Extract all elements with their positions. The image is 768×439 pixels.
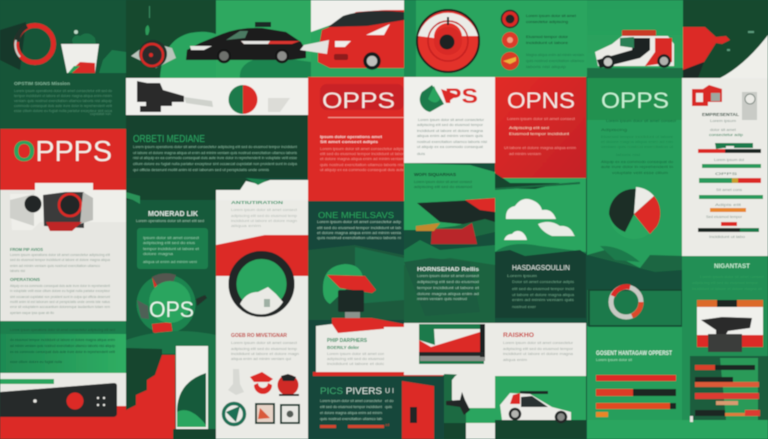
- text block: green band: [10, 328, 116, 364]
- list item one: consectetur adipiscing: [526, 20, 568, 24]
- icon row: small icons: [224, 369, 299, 424]
- body text: [133, 145, 298, 172]
- text block: white column bottom: GOEB RO MIVETIGNAR: [231, 333, 287, 339]
- body text: incididunt ut labore et dolore magna ali: [692, 287, 762, 291]
- list item three: laboris nisi aliquip: [526, 65, 566, 69]
- body text: incididunt ut labore et dolore magna: [503, 352, 574, 356]
- list item three: quis nostrud exercitation ullamco: [526, 59, 584, 63]
- label: heading tail: U I: [385, 388, 394, 395]
- heading: HASDAGSOULLIN: [512, 265, 570, 272]
- body text: et dolore magna aliqua enim ad minim venia: [317, 231, 402, 235]
- panel: car on green gradient: [587, 0, 683, 78]
- text block: laboris nisi: [616, 153, 640, 157]
- heading: MONERAD LIK: [148, 209, 199, 218]
- text block: ut aliquip ex ea commodo consequat duis aute: [320, 168, 404, 172]
- chart: horizontal bars: Sit amet cons: [716, 188, 742, 192]
- panel: target on green: [404, 0, 495, 77]
- body text: nisi ut aliquip ex ea commodo consequat duis aute irure dolor in reprehenderit in voluptate velit esse: [133, 156, 297, 160]
- chart: half pie: [228, 85, 258, 114]
- heading: ONE MHEILSAVS: [318, 210, 394, 220]
- text block: et dolore magna aliqua enim ad minim veniam: [320, 157, 404, 161]
- text block: Adipiscing elit sed: [509, 126, 549, 130]
- chart: horizontal bars: Incididunt ut labo: [709, 235, 745, 239]
- text block: white left: OPERATIONS: [10, 277, 40, 282]
- text block: white left: mollit anim id est laborum sed ut perspiciatis unde omnis iste natus: [10, 300, 110, 304]
- text block: Lorem ipsum dolor sit amet consectetur: [418, 118, 485, 122]
- text block: Eiusmod tempor incididunt: [509, 132, 570, 136]
- text block: elit sed do eiusmod tempor incididunt ut labor: [320, 152, 405, 156]
- text block: white left: Lorem ipsum operations dolor sit amet consectetur adipiscing elit: [10, 253, 111, 257]
- text block: top left: cupidatat non: [90, 112, 111, 116]
- panel: white strip with machine and pie: [126, 78, 308, 115]
- body text: tempor incididunt ut labore et: [417, 286, 480, 290]
- panel: top left dark green with ring and cup: [0, 0, 126, 129]
- icon: target: [417, 10, 479, 72]
- heading: RAISKHO: [503, 332, 534, 339]
- heading: PICS PIVERS: PICS PIVERS: [320, 386, 382, 397]
- heading: EMPRESENTAL: [702, 112, 739, 117]
- chart: pie: [609, 187, 660, 239]
- panel: red OPNS: [495, 77, 586, 178]
- text block: ut aliquip ex ea commodo consequat: [417, 145, 484, 149]
- panel: red OPPS centre left: [308, 77, 405, 201]
- title: OPPS: [322, 88, 395, 113]
- callout: green text box: aliqua ut enim ad minim veni: [143, 260, 197, 264]
- text block: white left: aperiam eaque ipsa quae ab illo: [10, 311, 54, 315]
- panel: green with clouds: [495, 173, 586, 260]
- text block: green band: ex ea commodo consequat duis aute irure dolor in reprehenderit velit: [10, 350, 116, 354]
- list item three: [501, 52, 584, 70]
- icon: red hat on green dome: [323, 264, 404, 336]
- text block: white column top: ANTIUTIRATION: [231, 200, 284, 206]
- chart: horizontal bars: Lorem ipsum dol: [714, 158, 744, 162]
- list item two: Eiusmod tempor dolor: [526, 35, 569, 39]
- text block: green lower: adipiscing elit sed do eiusmod: [414, 185, 472, 189]
- heading: NIGANTAST: [714, 263, 750, 270]
- title: OPNS: [507, 88, 575, 113]
- list item one: [502, 10, 577, 28]
- icon: document: [742, 92, 757, 120]
- icon: cup with plant: [61, 30, 126, 73]
- body text: elit sed do eiusmod tempor incid: [512, 287, 574, 291]
- text block: white column top: incididunt ut labore et dolore magn: [231, 219, 297, 223]
- icon: white car: [500, 391, 571, 422]
- body text: quis nostrud exercitation ullamco laboris ni: [317, 236, 401, 240]
- text block: top left: [14, 81, 113, 116]
- body text: [317, 220, 402, 240]
- text block: Aliquip ex ea commodo consequat du: [601, 160, 673, 164]
- panel: column two dark green with OPS dial: [126, 178, 255, 439]
- text block: [320, 134, 405, 172]
- panel: column two dark green with OPS dial: Lorem operations dolor sit amet elit sed: [136, 219, 204, 223]
- text fragments beside door: [385, 399, 393, 427]
- text block: green band: Lorem ipsum operations dolor sit amet consectetur adipiscing elit sed: [10, 328, 115, 332]
- body text: minim veniam quis nostrud: [417, 297, 467, 301]
- text block: adipiscing elit sed do eiusmod tempor: [417, 123, 484, 127]
- text block: top left: OPSTIM SIGNS Mission: [14, 81, 70, 86]
- body text: Lorem ipsum dolor sit amet consectetur: [503, 341, 574, 345]
- body text: ut labore et dolore magna aliqua: [512, 293, 575, 297]
- body text: [503, 341, 574, 362]
- text block: white left: in voluptate velit esse cillum dolore eu fugiat nulla pariatur excepteur: [10, 289, 111, 293]
- logo: OPS: PS: [445, 85, 478, 108]
- text block: white left: error sit voluptatem accusantium doloremque laudantium totam rem: [10, 305, 110, 309]
- card: white text card: BOERILY dolor: [327, 345, 359, 350]
- text block: top left: commodo consequat duis aute irure dolor in reprehenderit velit: [14, 104, 113, 108]
- panel: white card with bars: [682, 78, 768, 256]
- title: OPPS: OPPPS: [13, 136, 112, 168]
- icon: cloud right: [538, 222, 575, 236]
- body text: ut labore et dolore magna aliqua ut enim ad minim veniam quis nostrud exercitation ullamco laboris: [133, 151, 297, 155]
- body text: Lorem ipsum dolor sit amet consect: [417, 274, 480, 278]
- panel: icon list on green: [495, 0, 587, 77]
- text block: veniam quis nostrud exercitation ul: [601, 145, 673, 149]
- body text: Lorem ipsum: [507, 274, 537, 278]
- panel: lens and black car on green: [126, 0, 311, 78]
- text block: white left: laboris nisi: [10, 269, 25, 273]
- icon: red car: [300, 10, 404, 68]
- callout: green text box: tempor incididunt ut labore et: [143, 247, 200, 251]
- text block: white column bottom: [231, 333, 299, 361]
- icon: red staircase: [126, 348, 178, 439]
- text fragments beside door: ad: [385, 423, 389, 427]
- panel: device on white and red base: [0, 373, 126, 439]
- icon: red door: [402, 381, 434, 439]
- chart: horizontal bars: [698, 143, 763, 239]
- icon: cloud small: [504, 231, 527, 240]
- body text: dolore magna aliqua enim ad: [417, 292, 479, 296]
- body text: aliqua enim: [503, 358, 527, 362]
- text block: green band: ad minim veniam quis nostrud exercitation ullamco laboris nisi aliquip: [10, 344, 115, 348]
- chart: horizontal bars: Adipis elit: [715, 203, 743, 207]
- icon: small truck: [595, 30, 674, 68]
- list item two: incididunt ut labore: [526, 41, 568, 45]
- panel: white card with bars: consectetur adip: [709, 133, 743, 137]
- panel: green band with text: [0, 321, 126, 373]
- panel: white column with text and circle: [216, 178, 308, 439]
- panel: white card with bars: dolor sit amet: [710, 128, 737, 132]
- text block: [417, 118, 487, 156]
- icon: red ring: [0, 22, 54, 70]
- panel: white OPS logo: [404, 77, 495, 244]
- callout: green text box: dolore magna: [143, 252, 174, 256]
- text block: white left: sed do eiusmod tempor incididunt ut labore et dolore magna aliqua: [10, 258, 111, 262]
- text block: Ipsum dolor operations amet: [320, 134, 383, 139]
- text block: Ut labore et dolore magna aliqua enim: [504, 146, 576, 150]
- text block: ad minim veniam: [509, 152, 541, 156]
- list item three: Magna aliqua enim ad minim veniam: [526, 53, 584, 57]
- label: OPS: OPS: [149, 297, 194, 322]
- panel: red car on white: [300, 0, 404, 78]
- text block: white left: [10, 247, 111, 315]
- text block: white column bottom: Lorem ipsum dolor sit amet consect: [231, 341, 298, 345]
- text block: aliqua enim ad minim veniam quis: [417, 134, 483, 138]
- band: red wave: [216, 235, 308, 276]
- body text: adipiscing elit sed do eiusmod tempor: [503, 347, 574, 351]
- text block: green lower: Lorem ipsum dolor sit amet consect: [414, 180, 473, 184]
- icon: machine: [137, 81, 213, 112]
- list item two: [502, 32, 569, 48]
- chart: progress bars: [596, 375, 676, 417]
- panel: dark text block OBJECT MEDIANE: [126, 115, 308, 178]
- icon: camera: [10, 183, 126, 231]
- text block: white left: FROM PIP AVIOS: [10, 247, 43, 252]
- text fragments beside door: quis: [385, 405, 392, 409]
- text block: white left: sint occaecat cupidatat non proident sunt in culpa qui officia deserunt: [10, 295, 111, 299]
- text block: Sit amet consect adipis: [320, 139, 379, 144]
- text block: white column top: adipiscing elit sed do eiusmod temp: [231, 214, 297, 218]
- panel: dark green mid column with text: [404, 240, 495, 325]
- body text: nostrud exer: [512, 305, 537, 309]
- panel: bottom right green: [587, 256, 768, 439]
- icon: cloud large: [506, 199, 556, 219]
- text block: white left: Aliquip ex ea commodo consequat duis aute irure dolor in reprehenderit: [10, 284, 111, 288]
- icon: white card: [176, 346, 208, 429]
- text fragments beside door: et do: [385, 399, 393, 403]
- callout: green text box: Ipsum dolor sit amet consect: [143, 236, 200, 240]
- icon: red tag: [692, 85, 722, 106]
- card: white text card: PHIP DARPHERS: [327, 338, 368, 344]
- text block: white column bottom: incididunt ut labore et dolore magn: [231, 352, 299, 356]
- body text: Lorem ipsum dolor sit amet consectetur: [320, 399, 383, 403]
- chart: donut: [611, 287, 641, 317]
- panel: red OPPS left: [0, 129, 126, 190]
- body text: quis nostrud exercitation ullamco lab: [320, 417, 382, 421]
- text block: [601, 119, 677, 175]
- text block: white left: enim ad minim veniam quis nostrud exercitation ullamco: [10, 264, 100, 268]
- text block: green band: esse cillum dolore eu fugiat nulla: [10, 360, 63, 364]
- text block: nostrud exercitation ullamco laboris nisi: [417, 140, 487, 144]
- card: white text card: incididunt ut labore et dolore: [327, 362, 389, 366]
- text block: green band: do eiusmod tempor incididunt ut labore et dolore magna aliqua enim: [10, 338, 115, 342]
- body text: adipiscing elit sed do eiusmod: [417, 280, 479, 284]
- text block: top left: esse cillum dolore eu fugiat nulla pariatur excepteur sint occa: [14, 109, 113, 113]
- card: white text card: Lorem ipsum dolor sit amet consectetur: [327, 352, 400, 356]
- body text: [320, 399, 383, 421]
- chart: horizontal bars: Sed eiusmod tempor: [706, 215, 743, 219]
- body text: elit sed do eiusmod tempor incididunt: [320, 405, 383, 409]
- callout: green text box: adipiscing elit sed do eius: [143, 241, 195, 245]
- body text: et dolore magna aliqua enim ad minim: [320, 411, 382, 415]
- text block: top left: Lorem ipsum operations dolor sit amet consectetur elit sed do: [14, 89, 112, 93]
- body text: Dolor sit amet consectetur adipis: [512, 280, 574, 284]
- chart: stacked bars: [690, 356, 768, 422]
- panel: white left with text: [0, 183, 126, 321]
- icon: black device: [0, 383, 117, 417]
- text block: white column top: Lorem ipsum dolor sit amet consect: [231, 208, 298, 212]
- card: machine photo: [697, 300, 763, 352]
- text block: white column bottom: adipiscing elit sed do eiusmod temp: [231, 347, 297, 351]
- panel: white text and red door bottom: [320, 325, 495, 439]
- text block: [504, 117, 576, 156]
- panel: dark HASDAGSOULLIN text: [495, 250, 586, 318]
- body text: Lorem ipsum dolor sit amet consectetur adip: [317, 220, 401, 224]
- heading: ORBETI MEDIANE: [133, 133, 205, 145]
- body text: [507, 274, 575, 309]
- panel: bottom white blob and car: [444, 364, 586, 439]
- callout: green text box: [137, 228, 208, 269]
- text block: white column top: [231, 200, 298, 228]
- panel: white card with bars: Lorem ipsum: [710, 119, 736, 123]
- panel: white card with red scene and text: [404, 323, 586, 376]
- text block: green lower: [414, 172, 473, 189]
- chart: horizontal bars: OPPS: [715, 172, 738, 176]
- text block: quis nostrud exercitation ullamco laboris nisi: [320, 163, 404, 167]
- panel: dark band with ring: [587, 246, 683, 326]
- text block: aute irure dolor in reprehenderit in: [601, 165, 673, 169]
- text block: white column top: aliqua enim: [231, 224, 261, 228]
- card: white text card: [316, 324, 404, 372]
- text block: Lorem ipsum dolor sit amet consect: [507, 117, 576, 121]
- icon: camera lens: [131, 6, 176, 68]
- text block: Eiusmod tempor incididunt ut labore: [601, 135, 673, 139]
- text block: duis: [417, 152, 425, 156]
- icon: black ring with green circle: [232, 255, 290, 314]
- text block: top left: veniam quis nostrud exercitation ullamco laboris nisi aliquip: [14, 99, 112, 103]
- text block: Lorem ipsum dolor sit amet consectetur adipis: [320, 147, 404, 151]
- text block: green lower: WOPI SIQUARHAS: [414, 172, 456, 177]
- icon: silhouette: [446, 392, 470, 415]
- card: white text card: adipiscing elit sed do eiusmod tempor: [327, 357, 400, 361]
- body text: enim ad minim veniam quis: [512, 298, 574, 302]
- heading: HORNSEHAD Rellis: [417, 267, 479, 273]
- body text: adipiscing elit sed do eiusmod tempor: [692, 281, 759, 285]
- list item one: Lorem ipsum dolor sit amet: [526, 14, 577, 18]
- panel: top right dark with red shape: [683, 0, 768, 78]
- icon: plane wedge: [416, 198, 495, 244]
- icon: black car: [186, 22, 306, 62]
- body text: qui officia deserunt mollit anim id est laborum sed ut perspiciatis unde omnis: [133, 168, 269, 172]
- text block: voluptate velit esse cillum: [612, 171, 668, 175]
- text block: top left: tempor incididunt ut labore et dolore magna aliqua enim minim: [14, 94, 112, 98]
- text block: white column bottom: aliqua enim ad minim veniam qui: [231, 357, 291, 361]
- body text: elit sed do eiusmod tempor incididunt ut lab: [317, 226, 401, 230]
- icon: red scene: [419, 324, 485, 364]
- panel: dark column with heading, hat and card: [308, 201, 404, 439]
- title: OPPS: [601, 88, 669, 113]
- body text: Lorem ipsum operations dolor sit amet consectetur adipiscing elit sed do eiusmod tempor incididunt: [133, 145, 298, 149]
- text block: Lorem ipsum dolor sit amet consect: [606, 119, 677, 123]
- body text: Lorem ipsum dolor sit amet consect: [700, 275, 765, 279]
- panel: green OPPS: Lorem ipsum dolor sit: [596, 358, 633, 362]
- body text: cillum dolore eu fugiat nulla pariatur excepteur sint occaecat cupidatat non proident sunt in culpa: [133, 162, 298, 166]
- body text: [417, 274, 480, 301]
- text block: incididunt ut labore et dolore magna: [417, 129, 484, 133]
- chart: OPS dial: [136, 273, 207, 336]
- panel: green OPPS: [587, 78, 683, 439]
- text block: Adipiscing: [601, 128, 627, 132]
- body text: [692, 275, 765, 291]
- text block: et dolore magna aliqua enim ad min: [601, 140, 673, 144]
- logo: OPS: [420, 85, 478, 112]
- heading: GOSENT HANTAGAW OPPERST: [596, 351, 672, 357]
